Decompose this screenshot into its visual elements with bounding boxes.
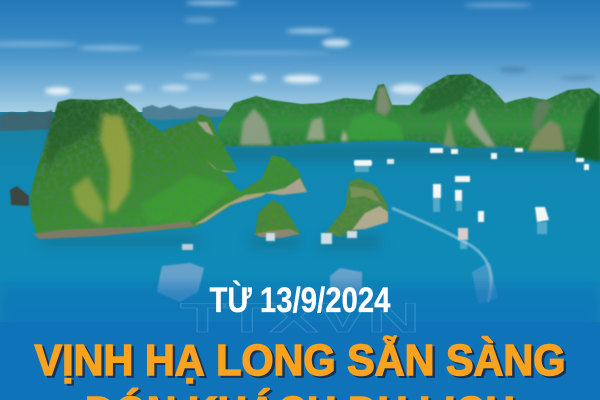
headline text: VỊNH HẠ LONG SẴN SÀNG — [34, 335, 566, 385]
centre rocky islet — [326, 178, 388, 237]
cruise boats — [182, 148, 589, 250]
headline — [34, 335, 568, 400]
boat reflections — [355, 166, 547, 249]
sky — [0, 0, 600, 118]
distant islands — [0, 105, 228, 131]
main limestone island — [10, 98, 244, 239]
boat wake — [392, 208, 491, 302]
lower blue fade — [0, 285, 600, 400]
headline shadow: VỊNH HẠ LONG SẴN SÀNG — [37, 337, 568, 387]
watermark: TTXVN — [180, 294, 420, 341]
sea — [0, 112, 600, 400]
faded foreground boats — [157, 262, 498, 304]
island reflections — [40, 146, 600, 249]
cliff faces — [240, 78, 600, 162]
back island chain — [216, 74, 600, 160]
date label: TỪ 13/9/2024 — [210, 280, 391, 320]
right small island and sandbar — [190, 155, 307, 225]
clouds — [0, 0, 596, 94]
small foreground islet — [255, 200, 300, 238]
